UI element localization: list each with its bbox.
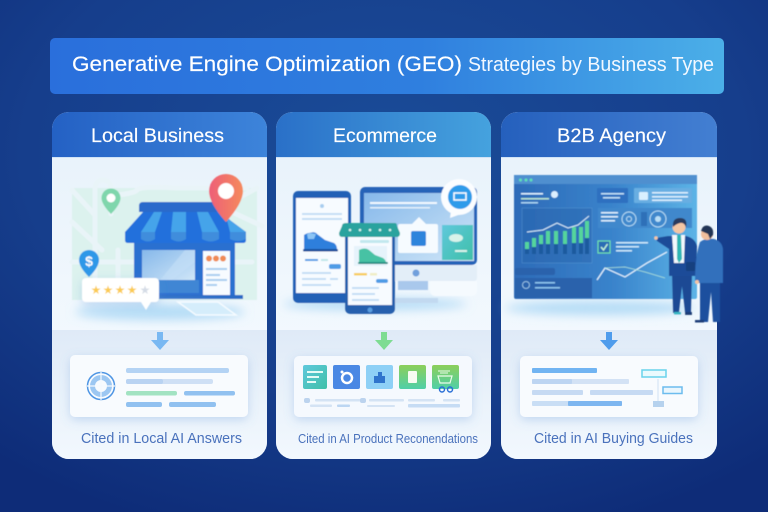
illustration: analytics dashboard (505, 175, 723, 322)
product text lines (304, 398, 460, 408)
caption: b2b: Cited in AI Buying Guides (534, 431, 693, 447)
icon: green location pin (102, 188, 120, 214)
ground glow (283, 298, 467, 310)
title banner: Generative Engine Optimization (GEO) (72, 53, 462, 76)
store (125, 202, 246, 299)
rating card: ★ (103, 283, 113, 297)
title banner (50, 38, 724, 94)
map (72, 180, 262, 300)
tile: search (333, 365, 360, 389)
bar chart (522, 208, 592, 263)
illustration: storefront on a map (72, 174, 262, 320)
panel: ecommerce (276, 112, 491, 459)
arrow (151, 332, 169, 350)
result text lines (126, 368, 235, 407)
rating card: ★ (115, 283, 125, 297)
icon: dollar pin (79, 250, 99, 277)
result card: product tiles (294, 356, 472, 417)
arrow (600, 332, 618, 350)
result card: buying guide (520, 356, 698, 417)
speech bubble icon (441, 179, 477, 218)
heading: b2b agency: B2B Agency (557, 125, 666, 147)
ground glow (75, 302, 245, 320)
person: client (695, 226, 723, 322)
rating card: ★ (140, 283, 150, 297)
comparison tags (642, 370, 682, 407)
guide text lines (532, 368, 653, 406)
icon: target (87, 372, 115, 400)
panel: b2b agency (501, 112, 723, 459)
dashboard screen (514, 175, 697, 299)
icon: dollar pin: $ (85, 253, 93, 269)
title banner: Strategies by Business Type (468, 54, 714, 76)
tile: cart (432, 365, 459, 392)
caption: ecommerce: Cited in AI Product Reconendations (298, 431, 478, 446)
rating card: ★ (91, 283, 101, 297)
arrow (375, 332, 393, 350)
line chart (597, 252, 667, 280)
shoe: green (359, 248, 386, 263)
icon: red location pin (209, 174, 243, 222)
rating card: ★ (127, 283, 137, 297)
tile: box (366, 365, 393, 389)
phone: left (293, 191, 351, 303)
tile: list (303, 365, 327, 389)
shoe: blue (304, 232, 337, 249)
shop awning (339, 223, 400, 237)
panel: local business (52, 112, 267, 459)
ground glow (505, 301, 695, 315)
widgets (515, 188, 692, 298)
heading: ecommerce: Ecommerce (333, 125, 437, 147)
result card: local answer (70, 355, 248, 417)
rating card (82, 278, 159, 310)
person: presenter (654, 218, 697, 315)
caption: local: Cited in Local AI Answers (81, 431, 242, 447)
phone: front (339, 223, 400, 314)
heading: local business: Local Business (91, 125, 224, 147)
tile: bag (399, 365, 426, 389)
monitor (360, 187, 477, 303)
illustration: devices (283, 179, 477, 314)
